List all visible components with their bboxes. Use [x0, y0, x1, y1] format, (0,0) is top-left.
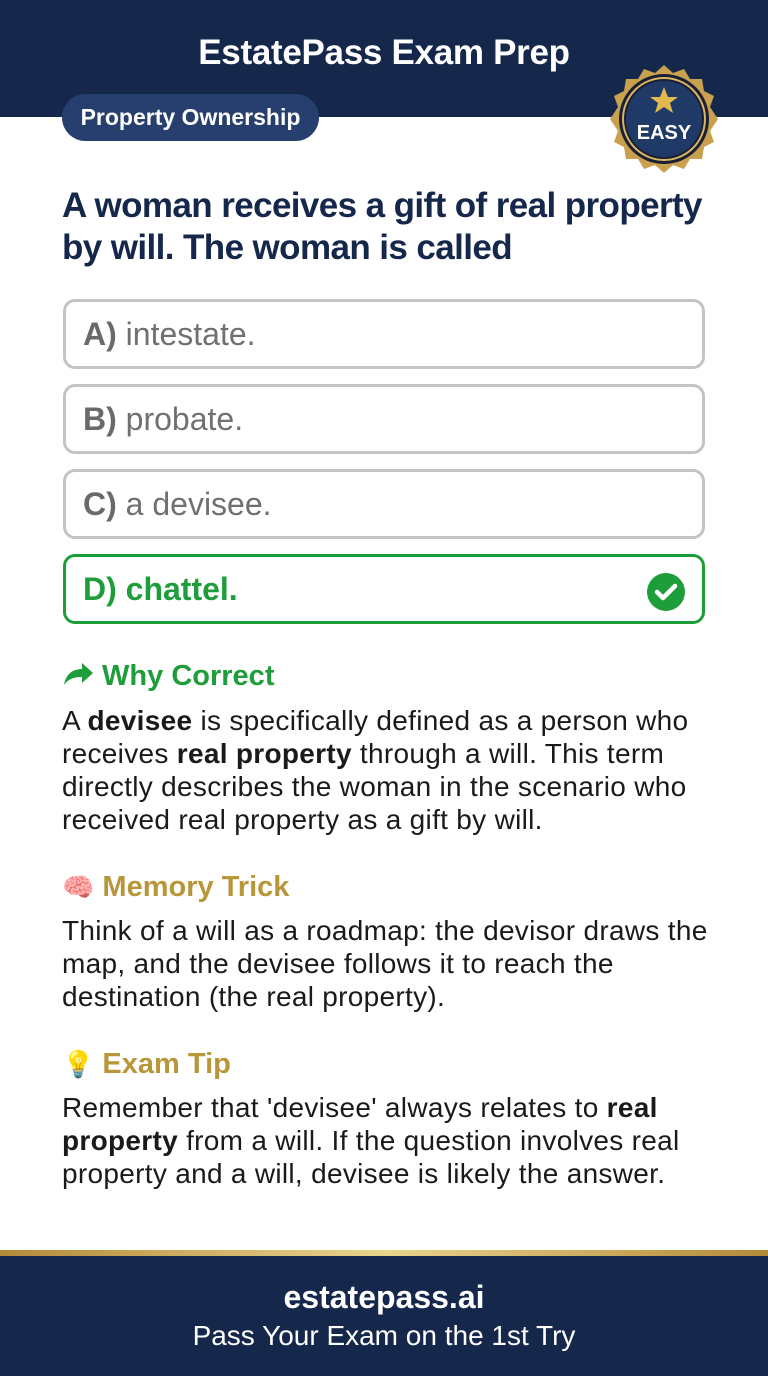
title: EstatePass Exam Prep — [198, 33, 570, 72]
icon: check — [647, 573, 685, 611]
text: exam tip — [62, 1092, 680, 1189]
text: exam tip: property from a will. If the question involves real — [62, 1125, 680, 1156]
text: memory trick — [62, 915, 708, 1012]
text: memory trick: Think of a will as a roadmap: the devisor draws the — [62, 915, 708, 946]
text: why correct — [62, 705, 688, 835]
question: A woman receives a gift of real property — [62, 186, 702, 225]
text: memory trick: map, and the devisee follows it to reach the — [62, 948, 614, 979]
option A: A) intestate. — [83, 316, 256, 352]
text: why correct: receives real property through a will. This term — [62, 738, 664, 769]
option C — [63, 469, 705, 539]
footer tagline: Pass Your Exam on the 1st Try — [193, 1320, 575, 1351]
header bar — [0, 0, 768, 117]
gold divider — [0, 1250, 768, 1256]
option D correct: D) chattel. — [83, 571, 238, 607]
option C: C) a devisee. — [83, 486, 272, 522]
text: why correct: A devisee is specifically defined as a person who — [62, 705, 688, 736]
question — [62, 186, 702, 267]
heading: memory trick: 🧠 Memory Trick — [62, 871, 289, 903]
text: memory trick: destination (the real property). — [62, 981, 445, 1012]
question: by will. The woman is called — [62, 228, 512, 267]
badge: easy — [610, 65, 718, 173]
category pill: Property Ownership — [81, 104, 300, 130]
text: exam tip: Remember that 'devisee' always relates to real — [62, 1092, 658, 1123]
option D correct — [63, 554, 705, 624]
option B — [63, 384, 705, 454]
heading: why correct: Why Correct — [102, 660, 274, 692]
text: why correct: received real property as a gift by will. — [62, 804, 543, 835]
badge: easy: EASY — [637, 122, 692, 144]
option B: B) probate. — [83, 401, 243, 437]
heading: exam tip: 💡 Exam Tip — [62, 1048, 231, 1080]
category pill — [62, 94, 319, 141]
text: exam tip: property and a will, devisee is likely the answer. — [62, 1158, 665, 1189]
text: why correct: directly describes the woman in the scenario who — [62, 771, 686, 802]
footer — [0, 1256, 768, 1376]
footer site: estatepass.ai — [283, 1279, 484, 1315]
option A — [63, 299, 705, 369]
